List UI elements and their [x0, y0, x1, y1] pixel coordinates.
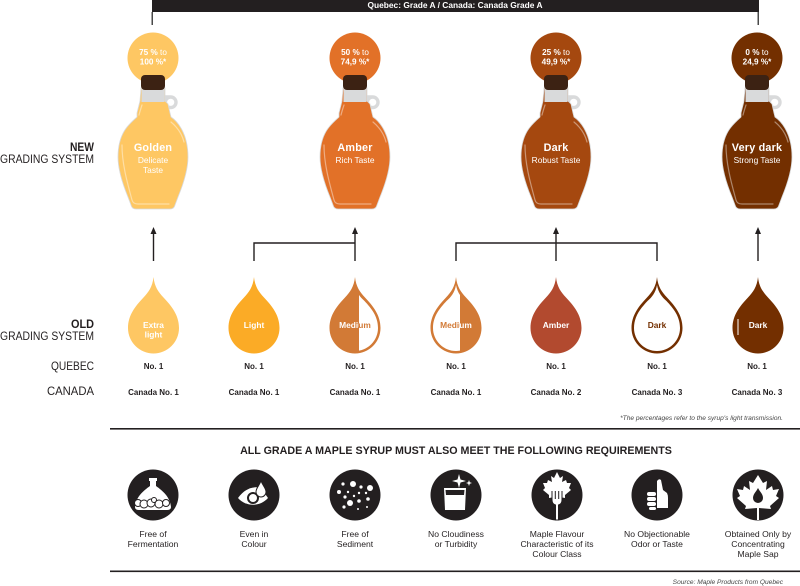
requirement: no objectionable odor: No Objectionable	[624, 529, 690, 539]
bottle: amber: 74,9 %*	[341, 58, 370, 66]
arrow: dark to very dark	[755, 227, 761, 261]
drop: medium, half filled left	[330, 277, 380, 354]
Canada grades row: Canada No. 3	[632, 388, 683, 397]
Quebec grades row: No. 1	[144, 362, 164, 371]
bottle: very dark: Very dark	[732, 142, 783, 154]
bottle: dark	[521, 32, 591, 209]
Quebec grades row: No. 1	[345, 362, 365, 371]
label: new grading system: GRADING SYSTEM	[0, 154, 94, 166]
requirement: maple flavour	[520, 470, 594, 559]
footnote: *The percentages refer to the syrup's light transmission.	[620, 415, 783, 422]
drop: extra light	[128, 277, 179, 354]
drop: medium, half filled right	[430, 277, 482, 354]
drop: light: Light	[244, 320, 264, 330]
drop: medium, half filled left: Medium	[339, 320, 371, 330]
icon: clear glass with sparkles	[430, 470, 482, 520]
bottle: dark: 49,9 %*	[542, 58, 571, 66]
header bar: Quebec and Canada grade	[152, 0, 759, 25]
arrow: medium, amber and dark to dark	[456, 227, 657, 261]
Canada grades row: Canada No. 2	[531, 388, 582, 397]
requirement: free of sediment: Free of	[341, 529, 369, 539]
requirement: no objectionable odor	[624, 470, 690, 549]
requirement: maple flavour: Colour Class	[532, 549, 582, 559]
Quebec grades row	[144, 362, 767, 371]
drop: extra light: light	[145, 330, 163, 340]
Canada grades row: Canada No. 1	[128, 388, 179, 397]
Canada grades row	[128, 388, 783, 397]
requirement: obtained from sap: Concentrating	[731, 539, 785, 549]
bottle: dark: Robust Taste	[532, 155, 581, 165]
icon: flask with bubbles	[128, 470, 178, 520]
bottle: very dark: Strong Taste	[734, 155, 781, 165]
drop: medium, half filled right: Medium	[440, 320, 472, 330]
bottle: golden: 75 % to	[139, 48, 167, 57]
drop: dark solid	[732, 277, 784, 354]
requirement: free of sediment	[330, 470, 380, 549]
bottle: amber: Amber	[337, 142, 373, 154]
requirement: free of sediment: Sediment	[337, 539, 374, 549]
icon: maple leaf with drop	[732, 470, 784, 520]
label: Quebec: QUEBEC	[51, 361, 94, 373]
bottle: golden: 100 %*	[140, 58, 167, 66]
heading: requirements: ALL GRADE A MAPLE SYRUP MUST ALSO MEET THE FOLLOWING REQUIREMENTS	[240, 445, 672, 457]
bottle: very dark: 0 % to	[745, 48, 769, 57]
requirement: free of fermentation: Free of	[139, 529, 167, 539]
icon: sediment dots	[330, 470, 380, 520]
requirement: even in colour: Colour	[241, 539, 267, 549]
requirement: no cloudiness: No Cloudiness	[428, 529, 484, 539]
bottle: dark: 25 % to	[542, 48, 570, 57]
drop: amber: Amber	[543, 320, 570, 330]
Canada grades row: Canada No. 1	[431, 388, 482, 397]
drop: dark outline	[632, 277, 682, 354]
bottle: golden: Golden	[134, 142, 172, 154]
bottle: amber: 50 % to	[341, 48, 369, 57]
Quebec grades row: No. 1	[446, 362, 466, 371]
bottle: very dark	[722, 32, 792, 209]
drop: extra light: Extra	[143, 320, 164, 330]
bottle: golden: Delicate	[138, 155, 168, 165]
bottle: very dark: 24,9 %*	[743, 58, 772, 66]
Quebec grades row: No. 1	[244, 362, 264, 371]
Quebec grades row: No. 1	[647, 362, 667, 371]
drop: medium, half filled right: Medium	[440, 320, 472, 330]
requirement: even in colour	[228, 470, 280, 549]
label: new grading system: NEW	[70, 142, 94, 154]
requirement: maple flavour: Maple Flavour	[530, 529, 584, 539]
Canada grades row: Canada No. 3	[732, 388, 783, 397]
label: old grading system: GRADING SYSTEM	[0, 331, 94, 343]
arrow: extra light to golden	[150, 227, 156, 261]
icon: thumbs up	[632, 470, 682, 520]
Canada grades row: Canada No. 1	[229, 388, 280, 397]
Quebec grades row: No. 1	[546, 362, 566, 371]
header bar: Quebec and Canada grade: Quebec: Grade A / Canada: Canada Grade A	[368, 0, 542, 10]
source note: Source: Maple Products from Quebec	[673, 579, 784, 586]
arrow: light and medium to amber	[254, 227, 358, 261]
requirement: free of fermentation	[128, 470, 179, 549]
bottle: dark: Dark	[544, 142, 569, 154]
drop: dark solid: Dark	[749, 320, 768, 330]
bottle: golden	[118, 32, 188, 209]
requirement: no objectionable odor: Odor or Taste	[631, 539, 683, 549]
requirement: obtained from sap: Obtained Only by	[725, 529, 792, 539]
label: old grading system: OLD	[71, 319, 94, 331]
Canada grades row: Canada No. 1	[330, 388, 381, 397]
requirement: even in colour: Even in	[240, 529, 269, 539]
requirement: free of fermentation: Fermentation	[128, 539, 179, 549]
Quebec grades row: No. 1	[747, 362, 767, 371]
requirement: obtained from sap	[725, 470, 792, 559]
icon: maple leaf with fork	[532, 470, 582, 520]
label: old grading system	[0, 319, 94, 343]
bottle: amber: Rich Taste	[336, 155, 375, 165]
label: new grading system	[0, 142, 94, 166]
bottle: golden: Taste	[143, 165, 163, 175]
requirement: obtained from sap: Maple Sap	[737, 549, 779, 559]
drop: amber	[530, 277, 582, 354]
label: Canada: CANADA	[47, 386, 94, 398]
icon: eye with drop	[228, 470, 280, 520]
requirement: maple flavour: Characteristic of its	[520, 539, 594, 549]
requirement: no cloudiness	[428, 470, 484, 549]
requirement: no cloudiness: or Turbidity	[435, 539, 478, 549]
drop: light	[228, 277, 280, 354]
drop: dark outline: Dark	[648, 320, 667, 330]
bottle: amber	[320, 32, 390, 209]
drop: medium, half filled left: Medium	[339, 320, 371, 330]
